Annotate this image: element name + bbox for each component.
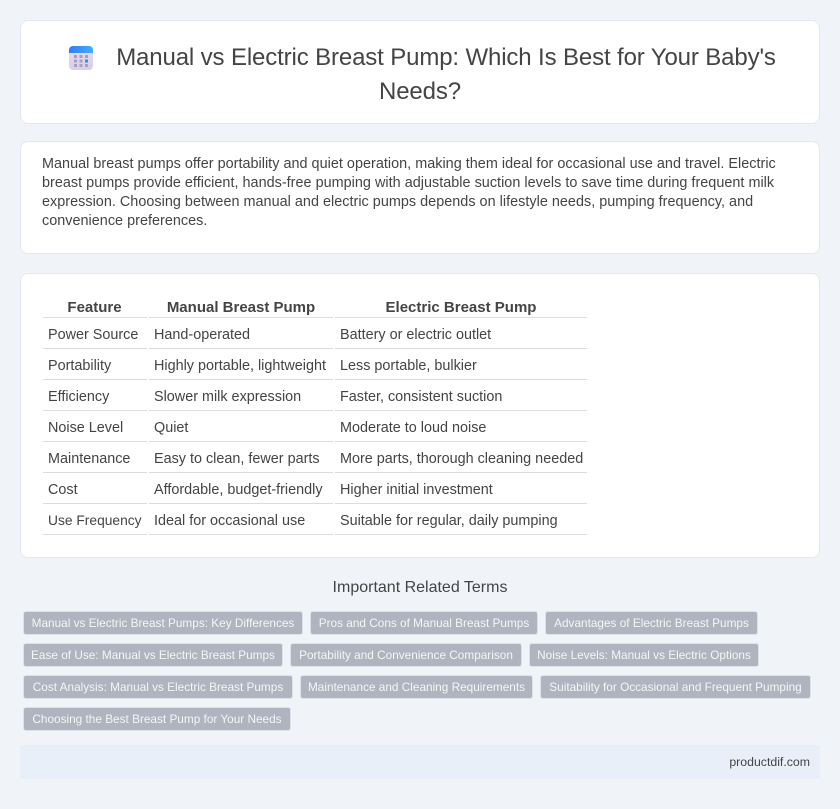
comparison table: Affordable, budget-friendly — [154, 482, 323, 498]
tag list: related terms — [23, 611, 811, 731]
comparison table: Faster, consistent suction — [340, 389, 502, 405]
comparison table: Power Source — [48, 327, 138, 343]
title: Needs? — [379, 78, 461, 105]
footer bar — [20, 745, 820, 779]
text block: summary: Manual breast pumps offer portability and quiet operation, making them ideal for occasional use and travel. Electric — [42, 156, 776, 172]
tag list: related terms: Ease of Use: Manual vs Electric Breast Pumps — [31, 648, 275, 662]
comparison table: Highly portable, lightweight — [154, 358, 326, 374]
comparison table: More parts, thorough cleaning needed — [340, 451, 583, 467]
text block: summary — [42, 156, 776, 229]
tag list: related terms: Noise Levels: Manual vs Electric Options — [537, 648, 751, 662]
comparison table: Quiet — [154, 420, 188, 436]
comparison table: Portability — [48, 358, 111, 374]
tag list: related terms: Suitability for Occasional and Frequent Pumping — [549, 680, 802, 694]
comparison table: Battery or electric outlet — [340, 327, 491, 343]
tag list: related terms: Pros and Cons of Manual Breast Pumps — [319, 616, 529, 630]
comparison table: Manual Breast Pump — [167, 299, 315, 316]
comparison table: Hand-operated — [154, 327, 250, 343]
comparison table: Ideal for occasional use — [154, 513, 305, 529]
comparison table: Less portable, bulkier — [340, 358, 477, 374]
text block: summary: breast pumps provide efficient, hands-free pumping with adjustable suction levels to save time during frequent milk — [42, 175, 774, 191]
comparison table: Use Frequency — [48, 513, 142, 528]
heading: related terms: Important Related Terms — [333, 579, 507, 596]
comparison table: Slower milk expression — [154, 389, 301, 405]
title: Manual vs Electric Breast Pump: Which Is Best for Your Baby's — [116, 44, 776, 71]
panel: title card — [20, 20, 820, 124]
tag list: related terms: Choosing the Best Breast Pump for Your Needs — [32, 712, 282, 726]
title — [116, 44, 776, 105]
comparison table: Efficiency — [48, 389, 109, 405]
text block: summary: convenience preferences. — [42, 213, 207, 229]
comparison table: Suitable for regular, daily pumping — [340, 513, 558, 529]
text block: summary: expression. Choosing between manual and electric pumps depends on lifestyle needs, pumping frequency, and — [42, 194, 753, 210]
comparison table: Feature — [67, 299, 122, 316]
panel: comparison table card — [20, 273, 820, 558]
comparison table: Easy to clean, fewer parts — [154, 451, 320, 467]
comparison table: Moderate to loud noise — [340, 420, 486, 436]
tag list: related terms: Portability and Convenience Comparison — [299, 648, 513, 662]
comparison table: Higher initial investment — [340, 482, 493, 498]
comparison table: Electric Breast Pump — [386, 299, 536, 316]
tag list: related terms: Advantages of Electric Breast Pumps — [554, 616, 749, 630]
footer source text: productdif.com — [729, 755, 810, 769]
panel: summary card — [20, 141, 820, 254]
tag list: related terms: Cost Analysis: Manual vs Electric Breast Pumps — [33, 680, 283, 694]
comparison table: Maintenance — [48, 451, 130, 467]
comparison table: Noise Level — [48, 420, 123, 436]
icon: calendar — [69, 46, 93, 70]
tag list: related terms: Manual vs Electric Breast Pumps: Key Differences — [32, 616, 294, 630]
comparison table: Cost — [48, 482, 78, 498]
tag list: related terms: Maintenance and Cleaning Requirements — [308, 680, 525, 694]
comparison table — [43, 299, 587, 535]
